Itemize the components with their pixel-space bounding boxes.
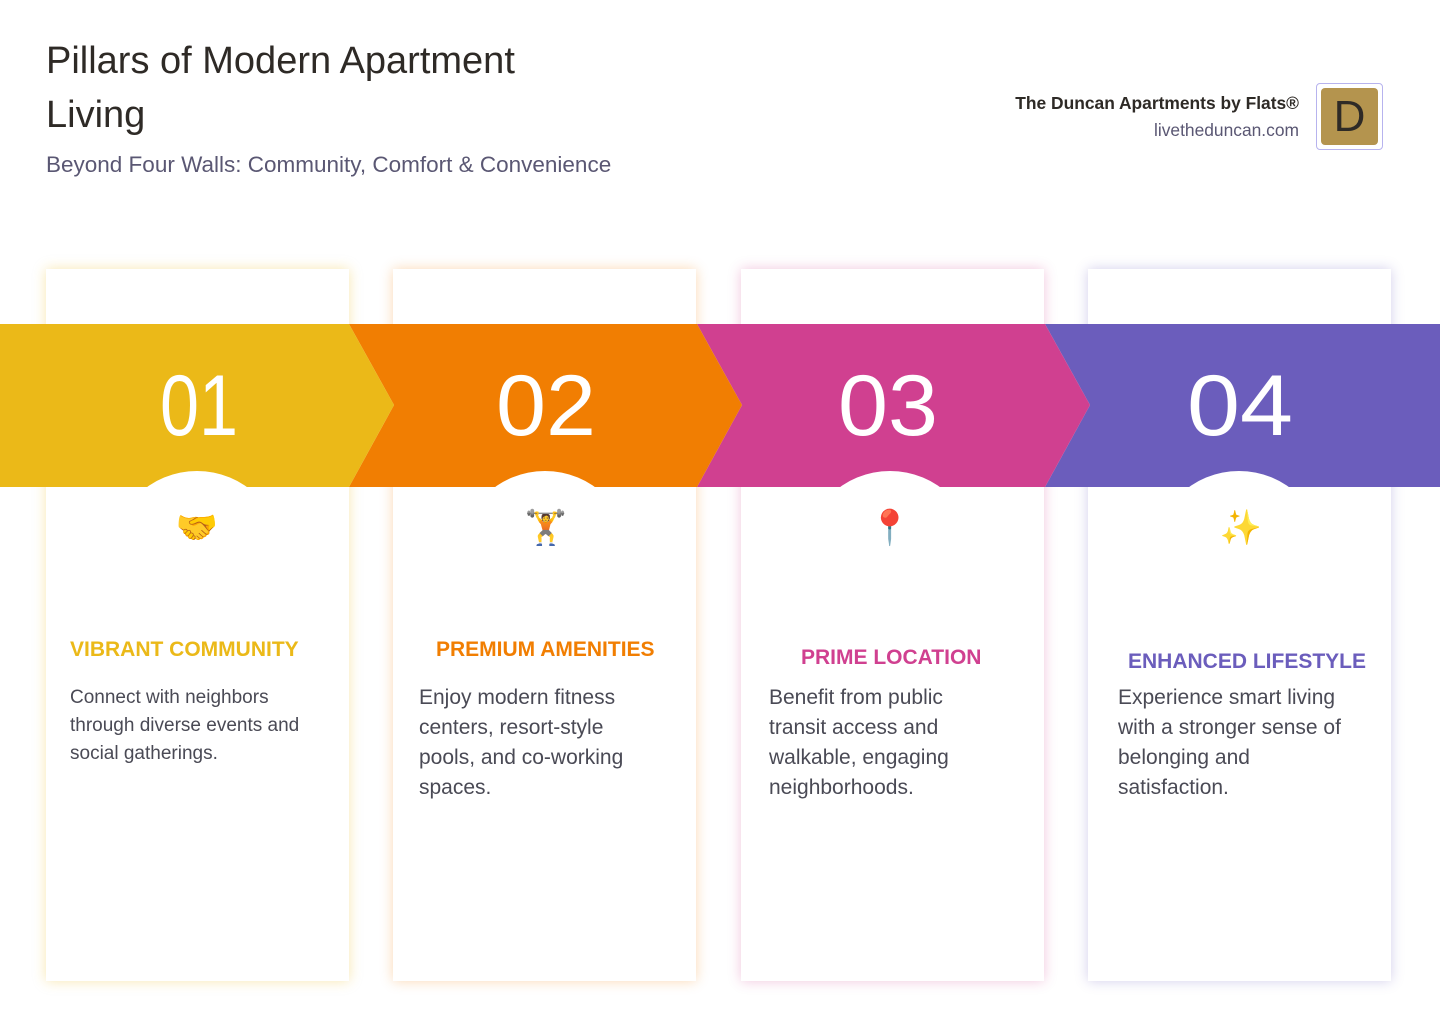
icon: sparkles: ✨ <box>1220 508 1262 548</box>
text 4: Experience smart living with a stronger sense of belonging and satisfaction. <box>1118 686 1341 799</box>
chevron band: 04 <box>1187 358 1293 454</box>
card 1 <box>46 269 349 981</box>
logo <box>1316 83 1383 150</box>
heading 2: PREMIUM AMENITIES <box>436 638 655 661</box>
subtitle: Beyond Four Walls: Community, Comfort & Convenience <box>46 152 611 177</box>
card 2 <box>393 269 696 981</box>
heading 4: ENHANCED LIFESTYLE <box>1128 650 1366 673</box>
brand url: livetheduncan.com <box>1154 120 1299 140</box>
card 3 <box>741 269 1044 981</box>
card 4 <box>1088 269 1391 981</box>
heading 1: VIBRANT COMMUNITY <box>70 638 299 661</box>
title: Pillars of Modern Apartment Living <box>46 40 515 136</box>
text 1: Connect with neighbors through diverse events and social gatherings. <box>70 687 299 764</box>
icon: weightlifter: 🏋 <box>525 508 567 548</box>
brand name: The Duncan Apartments by Flats® <box>1015 93 1299 113</box>
heading 3: PRIME LOCATION <box>801 646 981 669</box>
icon: handshake: 🤝 <box>176 508 218 548</box>
logo: D <box>1334 92 1365 141</box>
chevron band: 02 <box>496 358 596 454</box>
icon: pin: 📍 <box>869 508 911 548</box>
text 2: Enjoy modern fitness centers, resort-style pools, and co-working spaces. <box>419 686 623 799</box>
chevron band: 03 <box>838 358 938 454</box>
text 3: Benefit from public transit access and walkable, engaging neighborhoods. <box>769 686 949 799</box>
brand block <box>1015 83 1383 150</box>
chevron band: 01 <box>160 358 238 454</box>
